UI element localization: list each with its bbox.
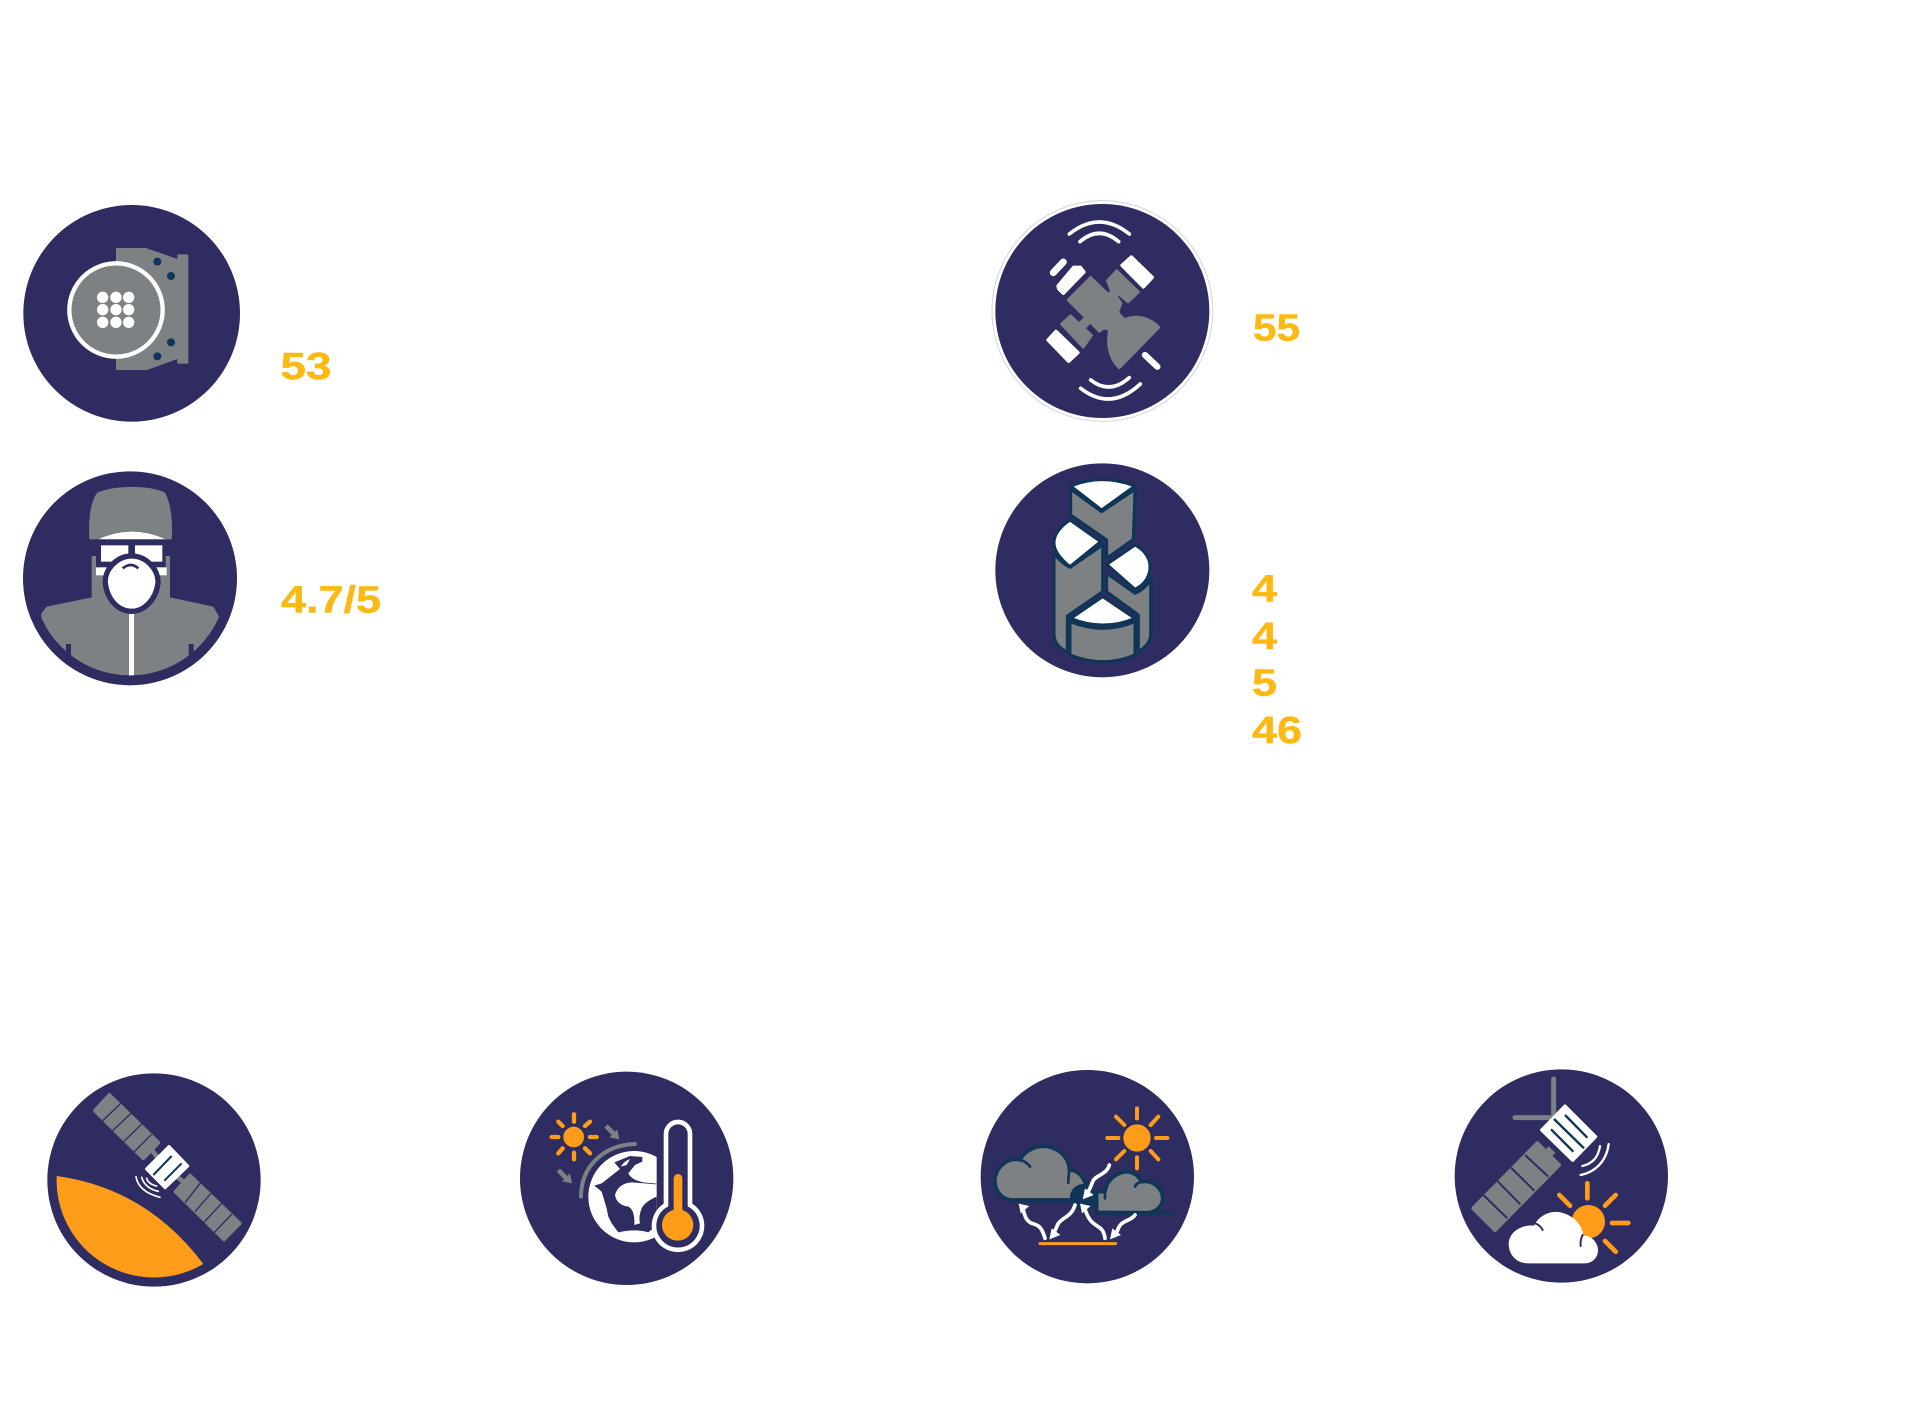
icon: clouds and radiation balance: [981, 1070, 1194, 1283]
icon: satellite observing clouds and sun: [1455, 1069, 1668, 1283]
orange earth segment: [57, 1176, 203, 1277]
radiation arrows and atmosphere: [558, 1126, 635, 1197]
sun: [552, 1114, 597, 1159]
stat: 53: 53: [280, 346, 332, 388]
icon: communications satellite: [992, 201, 1213, 421]
clouds: [995, 1146, 1172, 1213]
icon: satellite over earth: [47, 1073, 261, 1287]
icon: stacked cylinders: [995, 463, 1209, 677]
infographic canvas: [23, 200, 1668, 1287]
stat: 46: 46: [1252, 710, 1302, 752]
ground line: [1040, 1239, 1116, 1248]
sun: [1107, 1108, 1167, 1168]
radiation arrows: [1019, 1165, 1135, 1239]
icon: technician in protective suit: [23, 471, 237, 685]
globe: [588, 1151, 657, 1242]
icon: earth warming thermometer: [520, 1072, 733, 1285]
icon: optical instrument: [23, 205, 240, 422]
stat: 4.7/5: 4.7/5: [281, 580, 381, 622]
thermometer: [654, 1122, 702, 1250]
stat: 4: 4: [1252, 616, 1277, 658]
stat: 55: 55: [1253, 308, 1300, 350]
stat: 4: 4: [1252, 568, 1277, 610]
stat: 5: 5: [1252, 662, 1277, 704]
